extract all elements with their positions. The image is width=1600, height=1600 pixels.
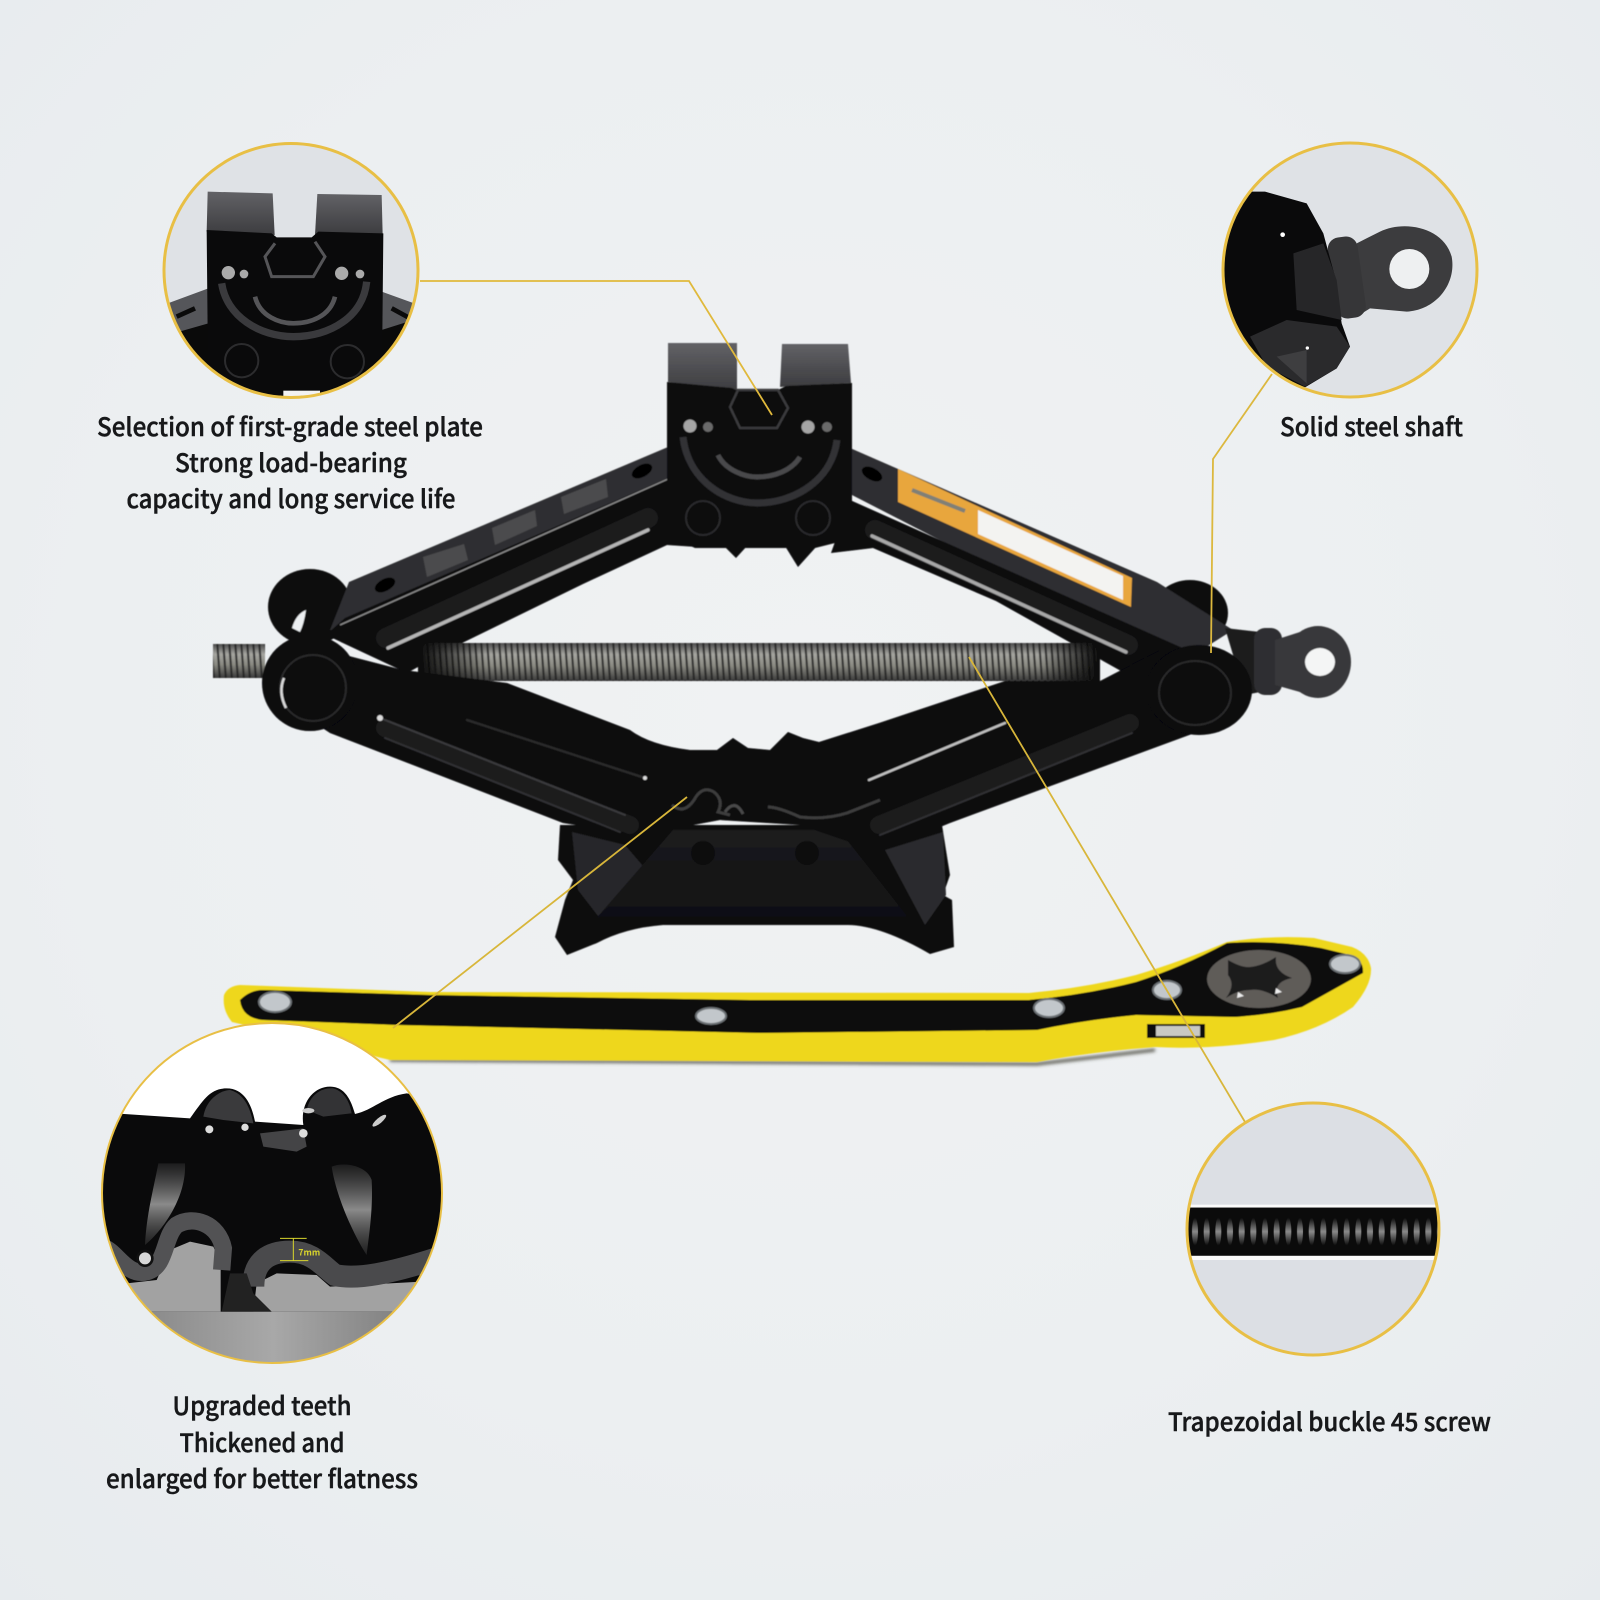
warning label on arm (898, 469, 1132, 607)
dark plate profile (103, 1221, 223, 1272)
saddle body (207, 230, 383, 403)
left pivot bolt (262, 635, 358, 731)
leader line: steel plate (420, 281, 772, 415)
saddle notch and arcs (222, 242, 367, 378)
heading text: upgraded teeth (106, 1387, 418, 1496)
rear pivot rings (268, 569, 1228, 646)
black teeth silhouette (90, 1087, 450, 1317)
gap detail (222, 1273, 272, 1312)
thickness dimension mark: 7mm (298, 1247, 320, 1259)
heading text: upgraded teeth: Upgraded teeth (172, 1387, 352, 1423)
right arm ribs (869, 723, 1132, 835)
threaded screw (213, 643, 1100, 681)
infographic canvas (98, 142, 1491, 1494)
screw close-up (1183, 1205, 1443, 1260)
scissor lower arms (280, 650, 1230, 852)
handle rivets (259, 955, 1360, 1024)
heading text: steel plate (97, 408, 483, 516)
eyelet (1326, 226, 1452, 320)
rivet highlights (222, 266, 364, 280)
panel: trapezoidal screw detail circle (1183, 1103, 1443, 1355)
left arm ribs (380, 718, 645, 832)
gear teeth (672, 790, 880, 818)
saddle top faces (207, 192, 383, 235)
end eyelet and right pivot bolt (1146, 626, 1351, 735)
upper left arm (326, 447, 713, 673)
upper right arm (831, 448, 1233, 676)
heading text: upgraded teeth: enlarged for better flatness (106, 1460, 418, 1496)
ratchet socket (1207, 950, 1311, 1008)
top saddle (667, 343, 852, 567)
panel: upgraded teeth detail circle (90, 1023, 457, 1378)
leader line: solid steel shaft (1211, 374, 1272, 653)
tooth highlights (145, 1088, 388, 1255)
jack base (555, 825, 954, 955)
heading text: steel plate: Selection of first-grade steel plate (97, 408, 483, 444)
leader line: trapezoidal screw (969, 657, 1245, 1122)
heading text: steel plate: capacity and long service life (126, 480, 456, 516)
panel: solid steel shaft detail circle (1217, 143, 1477, 397)
shaft body (1217, 192, 1350, 387)
heading text: steel plate: Strong load-bearing (175, 444, 408, 480)
panel: steel plate detail circle (163, 144, 423, 403)
handle slot (1147, 1024, 1205, 1038)
handle bar (224, 937, 1371, 1064)
thickness dimension mark (280, 1238, 320, 1261)
heading text: trapezoidal screw: Trapezoidal buckle 45 screw (1168, 1403, 1491, 1439)
side arms (170, 288, 412, 364)
light gray plate (129, 1242, 221, 1312)
heading text: upgraded teeth: Thickened and (180, 1424, 344, 1460)
leader line: upgraded teeth (393, 797, 687, 1028)
heading text: solid steel shaft: Solid steel shaft (1280, 408, 1463, 444)
product illustration: scissor jack and handle (213, 343, 1371, 1064)
